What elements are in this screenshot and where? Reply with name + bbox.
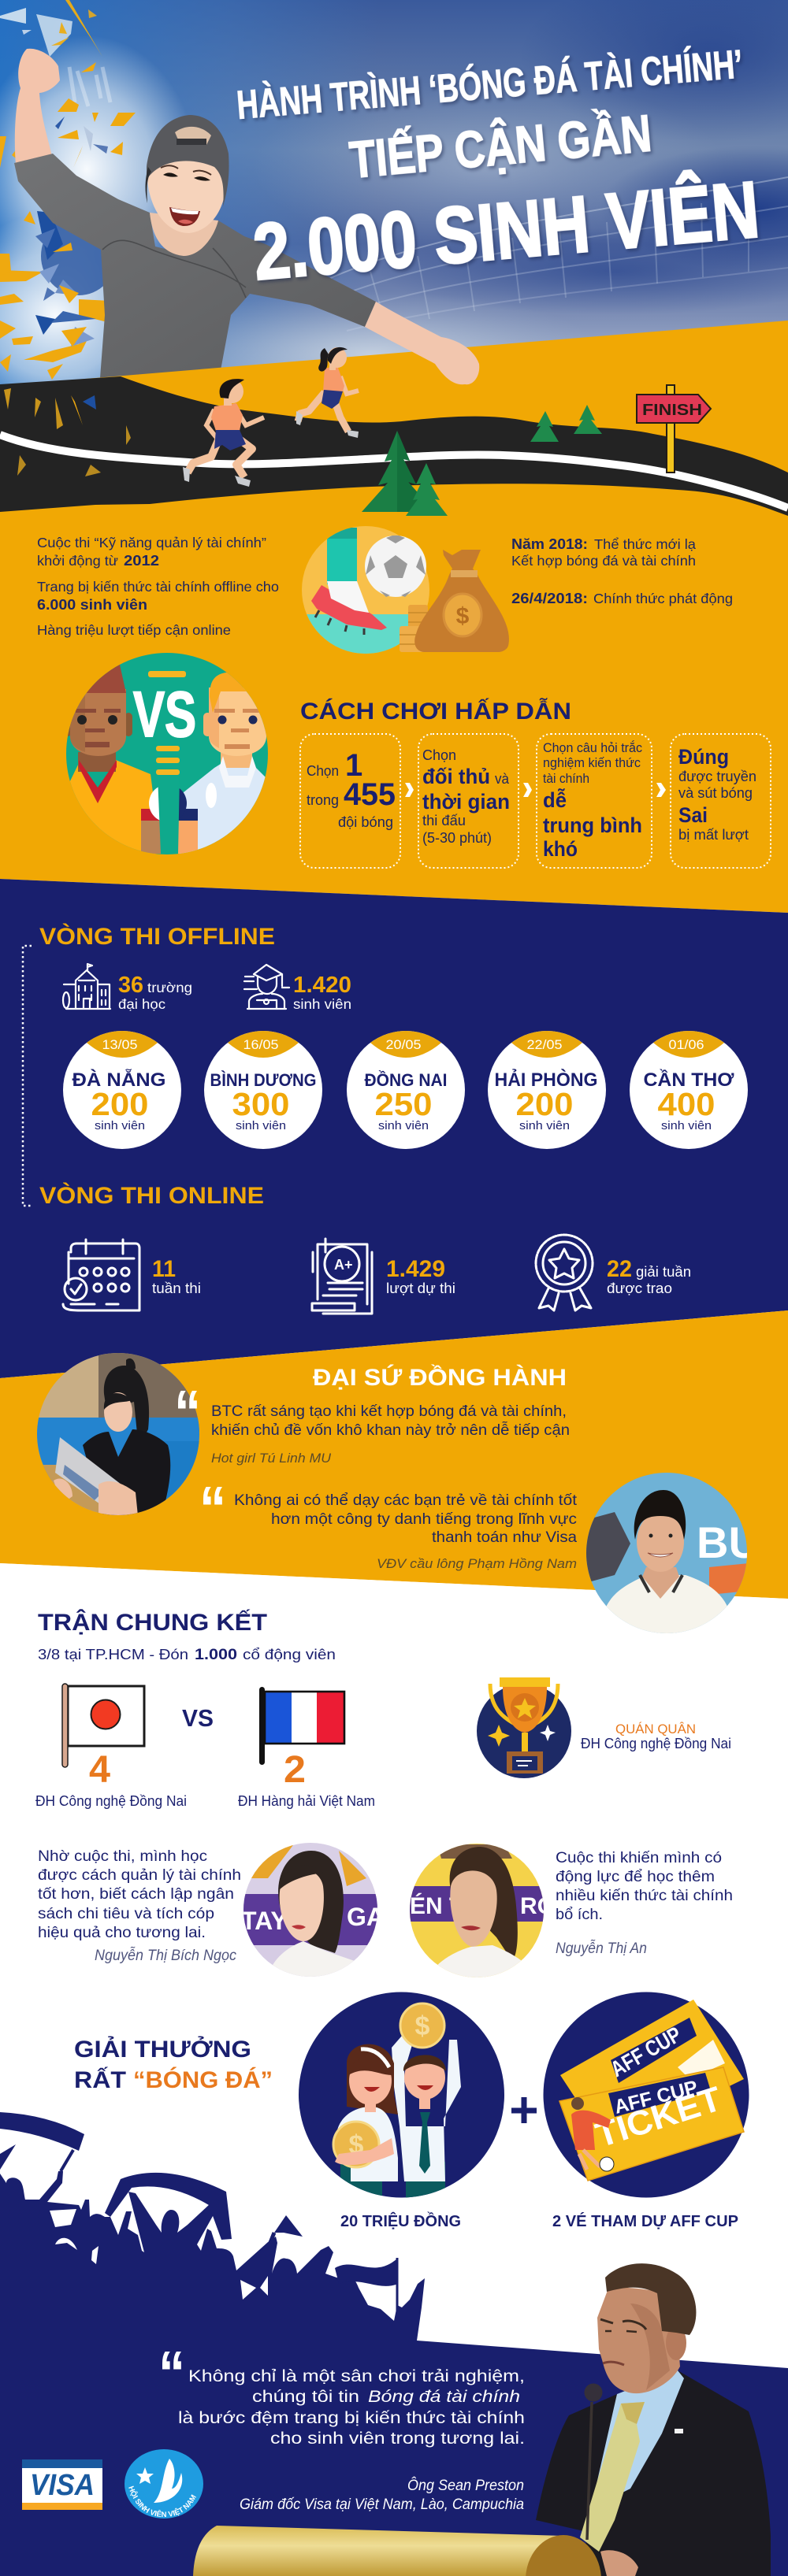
CEO quote: chúng tôi tin [252, 2388, 359, 2406]
intro text left: 6.000 sinh viên [37, 597, 147, 613]
coin stack [408, 605, 428, 652]
intro text right: Chính thức phát động [593, 591, 733, 606]
photo: student Bich Ngoc: GAY [347, 1903, 399, 1931]
icon: school building [63, 964, 110, 1009]
arrow [656, 783, 666, 797]
step 3 box: Chọn câu hỏi trắc [543, 740, 642, 755]
offline stat: universities: trường [147, 980, 192, 995]
heading: prizes: RẤT [74, 2066, 126, 2093]
CEO quote: là bước đệm trang bị kiến thức tài chính [178, 2409, 525, 2427]
icon: two players versus [62, 653, 274, 854]
navy section background [0, 879, 788, 1378]
quote: Pham Hong Nam: hơn một công ty danh tiếng trong lĩnh vực [271, 1510, 577, 1528]
suit [536, 2370, 771, 2576]
team: Dong Nai with flag: 4 [89, 1749, 110, 1791]
step 2 box: (5-30 phút) [422, 830, 492, 846]
hair [605, 2263, 696, 2335]
step 2 box: thời gian [422, 790, 510, 814]
step 3 box: nghiệm kiến thức [543, 755, 641, 770]
icon: graduate with laptop [244, 965, 289, 1009]
city badge: Da Nang [63, 1031, 181, 1149]
step 4 box: Đúng [678, 745, 729, 769]
grey long sleeve shirt [14, 154, 376, 378]
speaker: Sean Preston [536, 2263, 771, 2576]
step 4 box: và sút bóng [678, 785, 753, 801]
online stat: prizes: được trao [607, 1281, 672, 1296]
quote: Pham Hong Nam: VĐV cầu lông Phạm Hồng Nam [377, 1556, 577, 1571]
city badge: Can Tho: 400 [657, 1086, 716, 1122]
trees [362, 405, 602, 516]
step 2 box: và [495, 771, 510, 787]
team: Dong Nai with flag: ĐH Công nghệ Đồng Nai [35, 1793, 187, 1809]
city badge: Binh Duong: 16/05 [243, 1037, 279, 1052]
final match subheading: 3/8 tại TP.HCM - Đón [38, 1646, 188, 1662]
trophy icon and champion label [477, 1677, 731, 1778]
online stat: prizes: giải tuần [636, 1264, 691, 1280]
prize captions [340, 2211, 738, 2230]
arrow [523, 783, 532, 797]
quote: Pham Hong Nam: Không ai có thể dạy các bạn trẻ về tài chính tốt [234, 1492, 578, 1509]
city badge: Da Nang: 13/05 [102, 1037, 137, 1052]
final match subheading: cổ động viên [243, 1646, 336, 1662]
quote: Tu Linh: “ [174, 1377, 201, 1447]
CEO quote: Giám đốc Visa tại Việt Nam, Lào, Campuchia [240, 2496, 524, 2513]
white final section background [0, 1563, 788, 2368]
final match subheading: 1.000 [195, 1647, 237, 1663]
heading: prizes [74, 2036, 273, 2093]
title [235, 41, 763, 297]
runner: woman [296, 347, 359, 438]
city badge: Binh Duong: BÌNH DƯƠNG [210, 1070, 317, 1090]
prize icon: AFF Cup tickets: TICKET [591, 2079, 727, 2155]
step 1 box [300, 734, 400, 868]
city badge: Can Tho [630, 1031, 748, 1149]
step 1 box: trong [307, 792, 339, 808]
logo: Visa [22, 2459, 102, 2510]
step 1 box: 455 [344, 777, 396, 812]
photo: student Thi An [409, 1843, 556, 1978]
intro text right: Năm 2018: [511, 536, 588, 552]
hero background: stadium sky [0, 0, 788, 417]
student quote right [556, 1850, 733, 1957]
quote: Tu Linh: Hot girl Tú Linh MU [211, 1451, 332, 1466]
lapel pin [675, 2429, 683, 2433]
city badge: Hai Phong: sinh viên [519, 1119, 570, 1132]
city badge: Da Nang: sinh viên [95, 1119, 145, 1132]
photo: Pham Hong Nam: BU [697, 1518, 760, 1567]
icon: exam paper A+: A+ [334, 1257, 353, 1273]
quote: Pham Hong Nam [199, 1473, 578, 1571]
finish sign [637, 385, 711, 473]
city badge: Dong Nai: sinh viên [378, 1119, 429, 1132]
step 3 box: tài chính [543, 771, 589, 786]
step 2 box: thi đấu [422, 813, 466, 828]
intro text right [511, 536, 733, 606]
CEO quote [158, 2338, 525, 2513]
team: Dong Nai with flag [35, 1684, 187, 1809]
online stat: entries [312, 1239, 455, 1314]
offline stat: universities: đại học [118, 996, 165, 1012]
hand [600, 2550, 638, 2576]
step 3 box: khó [543, 837, 578, 861]
city badge: Dong Nai: ĐỒNG NAI [364, 1070, 448, 1090]
CEO quote: Ông Sean Preston [407, 2477, 524, 2494]
intro text right: Kết hợp bóng đá và tài chính [511, 553, 696, 569]
mouth [603, 2362, 624, 2365]
student quote left: Nguyễn Thị Bích Ngọc [95, 1948, 236, 1964]
student quote left: hiệu quả cho tương lai. [38, 1925, 206, 1941]
intro text left: Trang bị kiến thức tài chính offline cho [37, 579, 279, 595]
tie [580, 2402, 645, 2552]
step 3 box [537, 734, 652, 868]
offline stat: universities [63, 964, 192, 1012]
step 1 box: 1 [345, 748, 362, 783]
step 4 box: Sai [678, 803, 708, 827]
CEO quote: cho sinh viên trong tương lai. [270, 2430, 525, 2448]
heading: how to play: CÁCH CHƠI HẤP DẪN [300, 698, 571, 725]
intro text left: Hàng triệu lượt tiếp cận online [37, 622, 231, 638]
icon: two players versus: VS [133, 679, 196, 751]
city badge: Binh Duong: 300 [232, 1086, 290, 1122]
logo: Vietnam students association [125, 2449, 203, 2519]
icon: football boot, ball and money bag: $ [456, 603, 470, 629]
plus sign [511, 2097, 537, 2123]
confetti over road [4, 388, 131, 476]
quote: Tu Linh [174, 1377, 570, 1466]
team: Hang Hai with flag: ĐH Hàng hải Việt Nam [238, 1793, 375, 1809]
CEO quote: “ [158, 2338, 185, 2408]
arrow [405, 783, 414, 797]
runner: man [183, 379, 264, 487]
student quote left: Nhờ cuộc thi, mình học [38, 1848, 207, 1865]
city badge: Hai Phong [488, 1031, 606, 1149]
photo: student Thi An: ÉN T [410, 1892, 463, 1919]
online stat: prizes: 22 [607, 1256, 632, 1282]
prize icon: AFF Cup tickets [544, 1992, 749, 2197]
offline stat: universities: 36 [118, 973, 143, 998]
team: Hang Hai with flag: 2 [284, 1749, 306, 1791]
prize icon: students holding coins [299, 1992, 504, 2201]
team: Hang Hai with flag [238, 1687, 375, 1809]
online stat: weeks [63, 1240, 201, 1310]
photo: student Bich Ngoc: TAY [241, 1907, 288, 1935]
heading: prizes: GIẢI THƯỞNG [74, 2036, 251, 2063]
offline stat: students [244, 965, 351, 1012]
right player [178, 760, 268, 854]
money bag [414, 550, 509, 652]
step 1 box: Chọn [307, 763, 339, 779]
quote: Tu Linh: khiến chủ đề vốn khô khan này trở nên dễ tiếp cận [211, 1421, 570, 1439]
photo: Pham Hong Nam [585, 1472, 760, 1634]
left player [67, 760, 161, 854]
student quote right: nhiều kiến thức tài chính [556, 1888, 733, 1904]
photo: hot girl Tu Linh [37, 1353, 201, 1520]
centre ball [149, 788, 159, 821]
intro text right: Thể thức mới lạ [594, 536, 696, 552]
icon: rosette [536, 1235, 593, 1310]
face [597, 2286, 680, 2393]
student quote left: được cách quản lý tài chính [38, 1867, 241, 1884]
step 2 box [418, 734, 519, 868]
quote: Tu Linh: BTC rất sáng tạo khi kết hợp bóng đá và tài chính, [211, 1403, 567, 1420]
offline stat: students: sinh viên [293, 996, 351, 1012]
student quote left [38, 1848, 241, 1964]
prize icon: AFF Cup tickets: AFF CUP [612, 2077, 700, 2118]
prize captions: 2 VÉ THAM DỰ AFF CUP [552, 2212, 738, 2230]
eye and brow [600, 2319, 646, 2330]
city badge: Can Tho: sinh viên [661, 1119, 712, 1132]
race track road [0, 376, 788, 516]
backward cap [147, 115, 229, 206]
intro text left [37, 535, 279, 638]
shirt [591, 2370, 684, 2508]
step 4 box: được truyền [678, 769, 756, 784]
student quote right: Cuộc thi khiến mình có [556, 1850, 722, 1866]
icon: France flag [259, 1687, 344, 1765]
city badge: Can Tho: 01/06 [668, 1037, 704, 1052]
heading: final match: TRẬN CHUNG KẾT [38, 1609, 267, 1636]
quote: Pham Hong Nam: “ [199, 1473, 226, 1544]
prize icon: AFF Cup tickets: AFF CUP [607, 2022, 686, 2081]
city badge: Binh Duong: sinh viên [236, 1119, 286, 1132]
neck and face [147, 159, 225, 233]
city badge: Can Tho: CẦN THƠ [643, 1069, 734, 1091]
online stat: entries: lượt dự thi [386, 1281, 455, 1296]
step 3 box: dễ [543, 788, 567, 812]
online stat: prizes [536, 1235, 691, 1310]
title: TIẾP CẬN GẦN [348, 103, 654, 189]
student quote right: Nguyễn Thị An [556, 1940, 647, 1957]
icon: exam paper A+ [312, 1239, 372, 1314]
logo: Visa: VISA [30, 2469, 95, 2502]
man's outstretched arm and hand [365, 302, 479, 384]
step 4 box [671, 734, 771, 868]
online stat: entries: 1.429 [386, 1256, 445, 1282]
city badge: Da Nang: 200 [91, 1086, 148, 1122]
step 4 box: bị mất lượt [678, 827, 749, 843]
city badge: Hai Phong: 200 [515, 1086, 574, 1122]
prize icon: students holding coins: $ [415, 2011, 430, 2041]
hero man: raised arm, shirt, head [14, 49, 376, 378]
heading: online round: VÒNG THI ONLINE [39, 1182, 264, 1209]
photo: student Bich Ngoc [243, 1843, 377, 1977]
yellow ambassador section background [0, 1310, 788, 1599]
hero confetti shards behind the man [0, 0, 136, 380]
city badge: Hai Phong: 22/05 [526, 1037, 563, 1052]
online stat: weeks: tuần thi [152, 1281, 201, 1296]
final match subheading [38, 1646, 336, 1663]
step 1 box: đội bóng [338, 814, 393, 830]
icon: Japan flag [62, 1684, 144, 1767]
city badge: Binh Duong [204, 1031, 322, 1149]
yellow section background [0, 321, 788, 913]
online stat: weeks: 11 [152, 1256, 176, 1282]
raised arm and fist [15, 49, 60, 165]
city badge: Dong Nai: 250 [375, 1086, 432, 1122]
CEO quote: Không chỉ là một sân chơi trải nghiệm, [188, 2367, 525, 2385]
student quote left: sách chi tiêu và tích cóp [38, 1906, 214, 1922]
intro text left: 2012 [124, 553, 159, 569]
offline stat: students: 1.420 [293, 973, 351, 998]
prize captions: 20 TRIỆU ĐỒNG [340, 2211, 461, 2230]
icon: trophy [477, 1677, 571, 1778]
heading: prizes: “BÓNG ĐÁ” [133, 2066, 273, 2093]
microphone [585, 2383, 602, 2402]
finish sign: FINISH [642, 402, 702, 419]
crowd silhouette and navy footer [0, 2112, 788, 2576]
student quote right: động lực để học thêm [556, 1869, 715, 1885]
student quote left: tốt hơn, biết cách lập ngân [38, 1886, 234, 1903]
step 3 box: trung bình [543, 814, 642, 837]
gold lectern [193, 2526, 601, 2576]
step 2 box: đối thủ [422, 765, 490, 788]
student quote right: bổ ích. [556, 1907, 603, 1923]
eyes [163, 172, 178, 177]
icon: football boot, ball and money bag [299, 526, 509, 662]
open mouth [169, 207, 200, 226]
heading: offline round: VÒNG THI OFFLINE [39, 923, 275, 950]
ear [666, 2326, 686, 2360]
city badge: Dong Nai: 20/05 [386, 1037, 421, 1052]
step 2 box: Chọn [422, 747, 456, 763]
intro text left: Cuộc thi “Kỹ năng quản lý tài chính” [37, 535, 266, 550]
trophy icon and champion label: ĐH Công nghệ Đồng Nai [581, 1736, 731, 1751]
photo: student Thi An: RO [520, 1893, 556, 1919]
CEO quote: Bóng đá tài chính [368, 2388, 520, 2406]
heading: ambassadors: ĐẠI SỨ ĐỒNG HÀNH [313, 1364, 567, 1391]
city badge: Da Nang: ĐÀ NẴNG [72, 1069, 165, 1091]
intro text right: 26/4/2018: [511, 591, 588, 606]
icon: calendar [63, 1240, 139, 1310]
intro text left: khởi động từ [37, 553, 118, 569]
city badge: Hai Phong: HẢI PHÒNG [495, 1068, 597, 1091]
VS label: VS [182, 1704, 214, 1732]
quote: Pham Hong Nam: thanh toán như Visa [432, 1529, 577, 1546]
teal dashes and VS [148, 671, 186, 677]
trophy icon and champion label: QUÁN QUÂN [615, 1722, 696, 1736]
logo: Vietnam students association: HỘI SINH VIÊN VIỆT NAM [128, 2485, 196, 2517]
dotted connector between rounds [23, 946, 32, 1206]
prize icon: students holding coins: $ [349, 2130, 364, 2160]
city badge: Dong Nai [347, 1031, 465, 1149]
